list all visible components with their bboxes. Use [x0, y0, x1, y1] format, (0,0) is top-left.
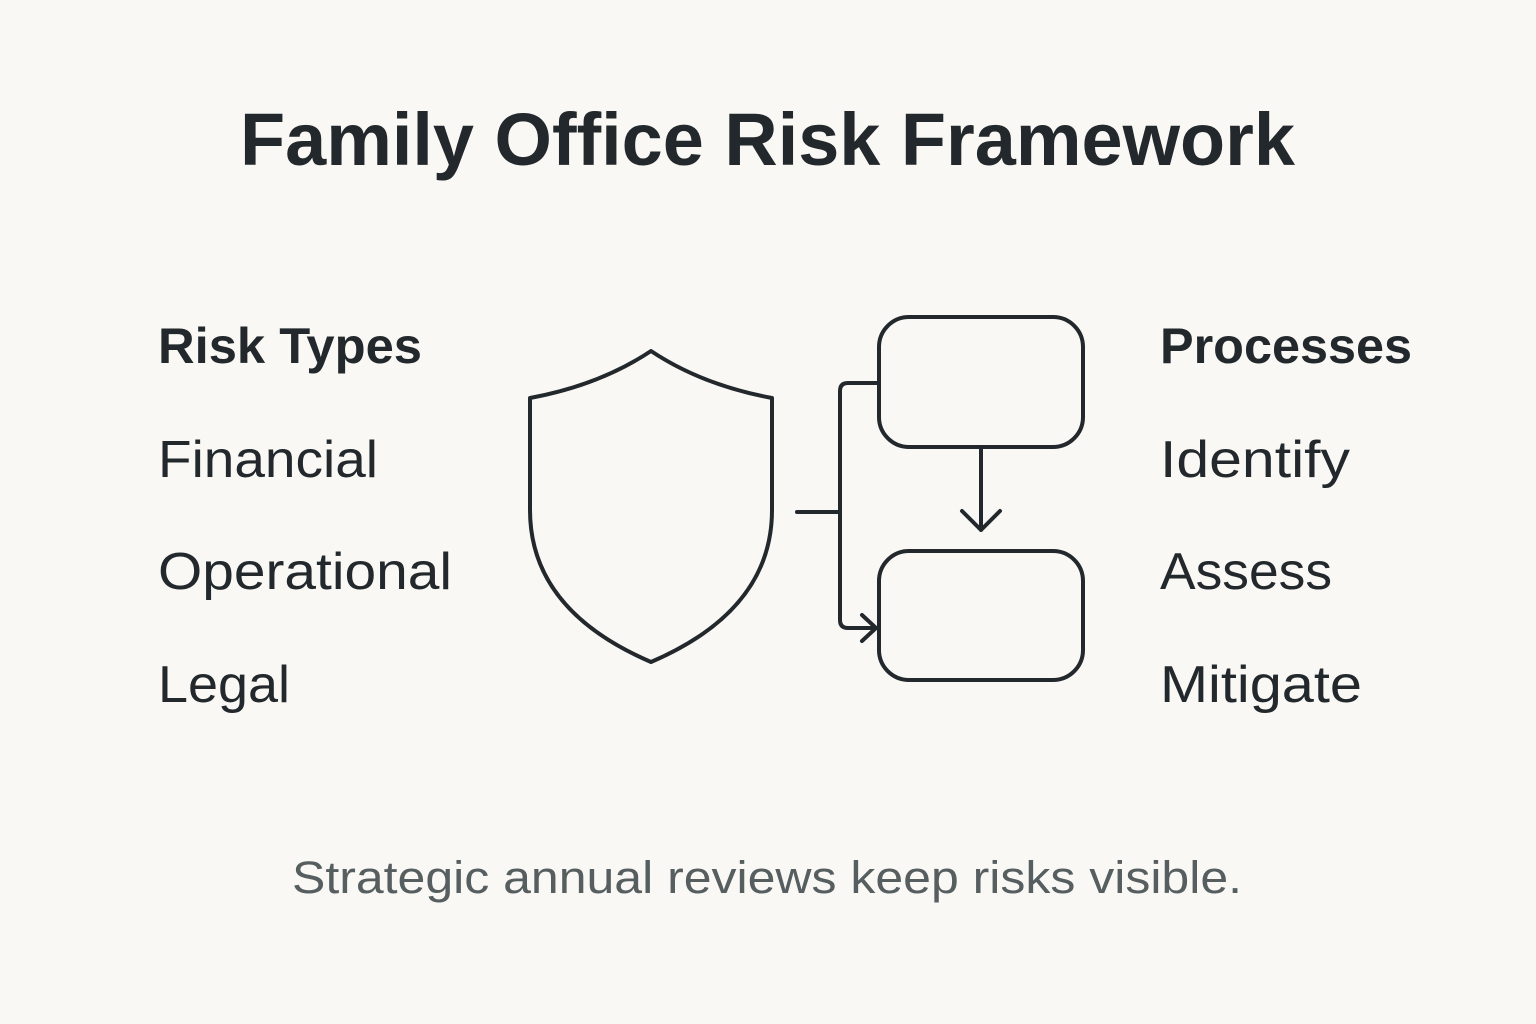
text: assess: Assess [1160, 543, 1332, 601]
text: identify: Identify [1160, 431, 1350, 489]
text: operational: Operational [158, 543, 452, 601]
box: bottom [879, 551, 1083, 680]
flowchart [797, 317, 1083, 680]
arrow: branch to boxes [840, 383, 879, 641]
panel: processes [1160, 318, 1412, 714]
text: mitigate: Mitigate [1160, 656, 1362, 714]
text: legal: Legal [158, 656, 290, 714]
box: top [879, 317, 1083, 447]
panel: risk types [158, 318, 452, 714]
footer caption: Strategic annual reviews keep risks visible. [292, 852, 1242, 903]
connector: shield to branch [797, 510, 840, 514]
title: Family Office Risk Framework [240, 98, 1296, 181]
heading: processes: Processes [1160, 318, 1412, 374]
text: financial: Financial [158, 431, 378, 489]
arrow: down [962, 448, 1000, 530]
icon: shield [530, 351, 772, 662]
heading: risk types: Risk Types [158, 318, 422, 374]
